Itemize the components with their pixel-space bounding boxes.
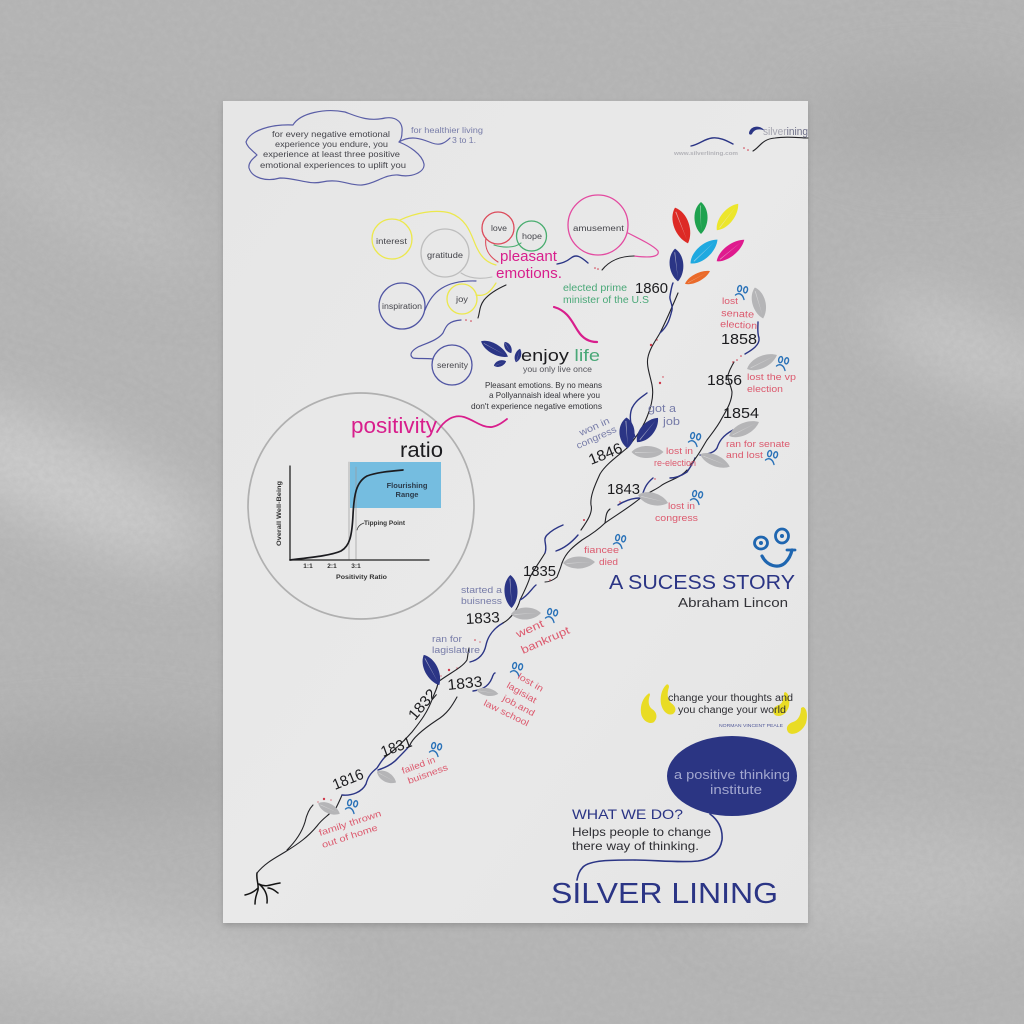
side note: for healthier living: for healthier living — [411, 125, 483, 135]
logo mark — [749, 127, 765, 135]
band label — [387, 481, 428, 499]
bubble: gratitude — [421, 229, 469, 277]
quote text: you change your world — [678, 705, 786, 716]
stems and roots — [245, 283, 759, 904]
website url: www.silverlining.com — [673, 151, 738, 157]
leaf: orange — [683, 268, 712, 287]
failure labels: election — [720, 319, 757, 332]
enjoy life block — [471, 337, 602, 411]
leaf: magenta — [713, 235, 748, 266]
cloud text — [260, 129, 406, 170]
success labels: congress — [575, 424, 619, 452]
cloud outline — [246, 111, 424, 185]
band label: Range — [396, 490, 418, 499]
heading: a sucess story: A SUCESS STORY — [609, 572, 795, 594]
success labels: minister of the U.S — [563, 295, 649, 306]
x-axis ticks: 1:1 — [303, 563, 313, 570]
success labels: got a — [648, 403, 677, 415]
bubble text: institute — [710, 782, 762, 797]
year labels: 1835 — [523, 563, 556, 580]
subheading: abraham lincon: Abraham Lincon — [678, 595, 788, 610]
year labels: 1858 — [721, 331, 757, 348]
bubble: amusement — [568, 195, 628, 255]
failure labels: senate — [721, 308, 754, 321]
bubble: serenity: serenity — [437, 361, 468, 370]
failure labels: lost the vp — [747, 372, 796, 383]
failure labels: died — [599, 557, 618, 568]
quote block — [641, 684, 807, 734]
heading: positivity: positivity — [351, 413, 437, 438]
heading: enjoy life: enjoy life — [521, 346, 600, 365]
paragraph: pleasant emotions: Pleasant emotions. By no means — [485, 380, 602, 390]
bubble: love: love — [491, 224, 508, 233]
icon: smiley — [754, 529, 795, 566]
top leaves: colored — [668, 200, 748, 287]
bubble: joy: joy — [455, 295, 468, 304]
x-axis ticks: 2:1 — [327, 563, 337, 570]
success labels: won in — [577, 416, 611, 439]
x-axis ticks: 3:1 — [351, 563, 361, 570]
cloud text: experience you endure, you — [275, 139, 388, 149]
cloud tail — [399, 138, 450, 144]
heading: pleasant emotions: pleasant — [500, 248, 558, 265]
cloud text: emotional experiences to uplift you — [260, 160, 406, 170]
success labels: buisness — [461, 596, 502, 607]
bubble: inspiration: inspiration — [382, 302, 422, 311]
threshold lines — [349, 462, 356, 559]
success labels: ran for — [432, 634, 462, 644]
failure labels: ran for senate — [726, 439, 790, 450]
description: Helps people to change — [572, 825, 711, 839]
failure labels: congress — [655, 513, 698, 524]
connector lines — [400, 211, 658, 359]
success labels: elected prime — [563, 283, 627, 294]
timeline tree — [245, 200, 796, 904]
emotion bubble map — [372, 195, 658, 385]
year labels: 1833 — [465, 609, 500, 628]
leaf: green — [694, 202, 708, 234]
x-axis title: Positivity Ratio — [336, 574, 387, 581]
failure labels: buisness — [406, 762, 450, 786]
bubble: amusement: amusement — [573, 224, 625, 233]
side note: for healthier living: 3 to 1. — [452, 135, 476, 145]
cloud callout: 3 to 1 — [246, 111, 483, 185]
line chart: well-being vs positivity ratio — [276, 462, 441, 581]
failure labels: bankrupt — [519, 625, 572, 657]
logo wordmark: silverining — [763, 126, 808, 138]
year labels: 1860 — [635, 280, 668, 297]
heading: what we do: WHAT WE DO? — [572, 806, 683, 822]
title: silver lining: SILVER LINING — [551, 878, 778, 910]
bubble: interest — [372, 219, 412, 259]
failure labels: lagisiat — [505, 680, 539, 706]
curve — [290, 470, 403, 560]
success labels — [432, 283, 680, 655]
leaf: red — [668, 205, 695, 246]
success labels: lagislature — [432, 645, 480, 655]
failure labels: failed in — [400, 755, 437, 776]
panel circle — [248, 393, 474, 619]
year labels: 1854 — [723, 405, 759, 422]
failure leaves: gray — [316, 286, 780, 818]
failure labels: fiancee — [584, 545, 619, 556]
bubble: hope: hope — [522, 232, 543, 241]
bubble: joy — [447, 284, 477, 314]
failure labels: re-election — [654, 458, 696, 469]
cloud text: experience at least three positive — [263, 149, 400, 159]
description: there way of thinking. — [572, 839, 699, 853]
heading: pleasant emotions: emotions. — [496, 265, 562, 282]
leaf: navy — [668, 248, 685, 282]
bubble: serenity — [432, 345, 472, 385]
poster sheet — [223, 101, 808, 923]
bubble text — [674, 767, 790, 797]
band label: Flourishing — [387, 481, 428, 490]
wave accent — [437, 416, 507, 432]
bubble: interest: interest — [376, 237, 408, 246]
paragraph: pleasant emotions: don't experience negative emotions — [471, 401, 602, 411]
paragraph: pleasant emotions: a Pollyannaish ideal where you — [489, 390, 600, 400]
logo: silverining — [673, 126, 808, 157]
failure labels — [318, 296, 796, 850]
year labels: 1816 — [330, 766, 366, 794]
side note: for healthier living — [411, 125, 483, 145]
year labels: 1833 — [447, 673, 483, 694]
failure labels: and lost — [726, 450, 763, 461]
quote text — [668, 693, 793, 716]
bubble text: a positive thinking — [674, 767, 790, 782]
quote text: change your thoughts and — [668, 693, 793, 704]
success labels: started a — [461, 585, 503, 596]
icon: navy leaves — [479, 337, 523, 369]
bubble: gratitude: gratitude — [427, 251, 464, 260]
year labels: 1843 — [607, 481, 640, 498]
scattered red dots — [317, 339, 742, 803]
institute bubble — [577, 736, 797, 880]
paragraph: pleasant emotions — [471, 380, 602, 411]
year labels: 1846 — [586, 440, 625, 469]
heading: ratio: ratio — [400, 439, 443, 462]
quote marks: yellow — [641, 684, 807, 734]
bubble tail — [577, 814, 722, 880]
success labels: job — [662, 416, 680, 428]
year labels: 1832 — [405, 686, 441, 724]
failure labels: lost in — [516, 671, 545, 694]
bubble: love — [482, 212, 514, 244]
what we do block — [572, 806, 711, 853]
y-axis title: Overall Well-Being — [276, 481, 283, 546]
panel: positivity ratio — [248, 393, 507, 619]
subheading: you only live once: you only live once — [523, 365, 593, 374]
failure labels: lost — [722, 296, 738, 307]
bubble: inspiration — [379, 283, 425, 329]
leaf: cyan — [686, 235, 722, 268]
heading: pleasant emotions — [496, 248, 562, 282]
tipping point label: Tipping Point — [364, 520, 406, 527]
roots — [245, 873, 280, 904]
description — [572, 825, 711, 853]
failure labels: lost in — [668, 501, 695, 512]
cloud text: for every negative emotional — [272, 129, 390, 139]
trunk — [257, 812, 331, 873]
year labels — [330, 280, 759, 794]
bubble: hope — [516, 221, 546, 251]
logo swoosh — [691, 137, 808, 151]
sad face icons — [346, 285, 789, 813]
flourishing range band — [350, 462, 441, 508]
x-axis ticks — [303, 563, 361, 570]
quote attribution: NORMAN VINCENT PEALE — [719, 723, 783, 728]
axes — [290, 466, 429, 560]
failure labels: election — [747, 384, 783, 395]
failure labels: law school — [482, 698, 531, 728]
story title block — [609, 529, 795, 610]
curve: pink accent — [554, 307, 597, 342]
year labels: 1856 — [707, 372, 742, 389]
tipping point label — [357, 520, 406, 530]
failure labels: job,and — [500, 692, 537, 718]
year labels: 1831 — [379, 734, 414, 761]
failure labels: lost in — [666, 446, 693, 457]
failure labels: out of home — [321, 822, 379, 850]
failure labels: family thrown — [318, 808, 382, 838]
success leaves: navy — [418, 414, 663, 688]
failure labels: went — [513, 618, 546, 641]
leaf: yellow — [712, 200, 743, 234]
bubble ellipse — [667, 736, 797, 816]
